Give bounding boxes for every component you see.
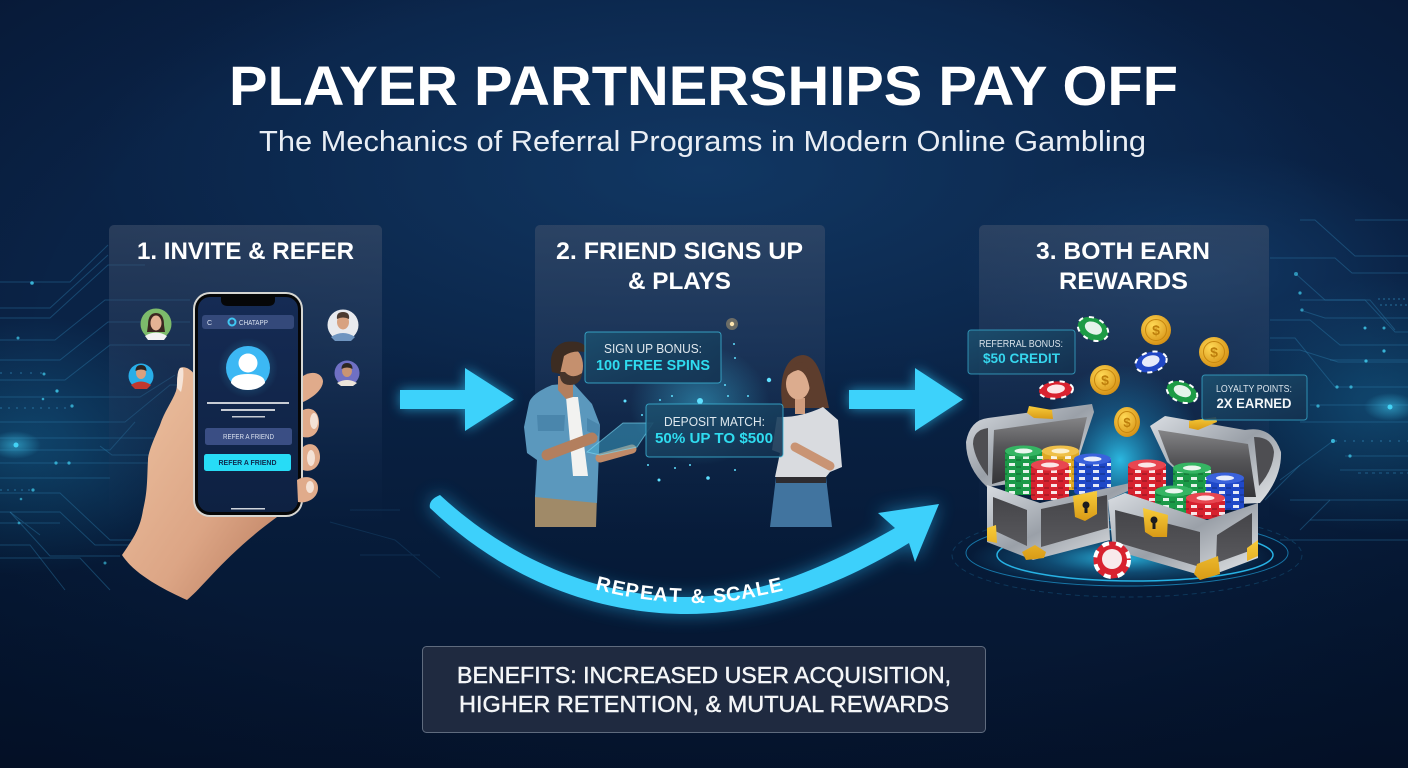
gold coin: [1114, 407, 1140, 437]
avatar: man on purple: [334, 360, 360, 386]
left chest: [966, 404, 1130, 560]
gold coin: [1199, 337, 1229, 367]
gold coin: $: [1152, 322, 1160, 338]
phone header bar: C: [207, 320, 212, 327]
illustration: friend avatars: [128, 308, 360, 389]
man in denim shirt: [524, 342, 632, 527]
keyhole plate: [1073, 491, 1097, 521]
gold coin: [1141, 315, 1171, 345]
woman with long hair: [770, 355, 842, 527]
circuit nodes: right: [1294, 272, 1408, 458]
gold corners: [1194, 540, 1258, 580]
arrow: repeat and scale loop: [430, 495, 939, 614]
gold latch: [1027, 406, 1053, 419]
phone header bar: [202, 315, 294, 329]
avatar: woman on green: [140, 308, 172, 340]
arrow label: [594, 573, 785, 608]
arrow: step 2 to step 3: [849, 368, 963, 431]
keyhole plate: [1143, 508, 1168, 537]
gold coin: $: [1210, 344, 1218, 360]
body: [987, 483, 1130, 560]
red chip: [1038, 380, 1074, 400]
callout: referral bonus: $50 CREDIT: [983, 350, 1060, 366]
circuit pattern: right: [1265, 220, 1408, 540]
floating coins and chips: [1038, 312, 1229, 437]
centre sparkle field: [624, 318, 771, 482]
arrow label: S: [712, 585, 727, 607]
arrow label: &: [690, 586, 705, 608]
arrow: step 1 to step 2: [400, 368, 514, 431]
circuit pattern: left: [0, 245, 440, 590]
callout: sign up bonus: SIGN UP BONUS:: [604, 342, 702, 356]
callout: loyalty points: 2X EARNED: [1216, 395, 1292, 411]
arrow label: P: [624, 579, 640, 603]
heading: step 3: [1036, 238, 1210, 295]
arrow label: A: [739, 580, 757, 604]
panel: benefits: [422, 646, 986, 732]
gold coin: [1090, 365, 1120, 395]
callout: referral bonus: REFERRAL BONUS:: [979, 339, 1063, 350]
phone: [193, 292, 303, 517]
gold coin: $: [1123, 415, 1131, 430]
callout: loyalty points: LOYALTY POINTS:: [1216, 384, 1292, 395]
gold latch: [1189, 417, 1217, 430]
holographic tablet: [587, 423, 653, 455]
avatar: man on light: [328, 310, 358, 341]
arrow label: R: [594, 573, 613, 598]
title: PLAYER PARTNERSHIPS PAY OFF: [229, 54, 1178, 117]
benefits text: HIGHER RETENTION, & MUTUAL REWARDS: [459, 691, 949, 717]
green chip: [1163, 377, 1201, 407]
circuit nodes: left: [0, 281, 106, 564]
benefits text: BENEFITS: INCREASED USER ACQUISITION,: [457, 662, 951, 688]
gold coin: $: [1101, 372, 1109, 388]
subtitle: The Mechanics of Referral Programs in Modern Online Gambling: [259, 126, 1146, 158]
phone header bar: CHATAPP: [239, 320, 268, 327]
arrow label: A: [652, 583, 669, 607]
arrow label: E: [639, 582, 655, 605]
callout: deposit match: 50% UP TO $500: [655, 430, 773, 447]
hand palm: [122, 367, 277, 600]
gold corners: [987, 525, 1046, 560]
panel: step 2 background: [535, 225, 825, 535]
callout: deposit match: DEPOSIT MATCH:: [664, 415, 765, 429]
profile avatar: [218, 338, 278, 398]
heading: step 1: 1. INVITE & REFER: [137, 238, 354, 265]
heading: step 2: & PLAYS: [628, 268, 731, 295]
heading: step 2: [556, 238, 803, 295]
arrow label: C: [725, 583, 742, 606]
button: refer a friend, muted: [205, 428, 292, 445]
fingers: [297, 373, 323, 502]
button: refer a friend, highlighted: [204, 454, 291, 471]
arrow label: E: [609, 576, 627, 601]
callout: sign up bonus: 100 FREE SPINS: [596, 357, 710, 374]
blue chip: [1133, 348, 1169, 376]
arrow label: E: [767, 574, 785, 598]
heading: step 3: REWARDS: [1059, 268, 1188, 295]
lid: [966, 404, 1094, 487]
avatar: boy on blue: [128, 364, 154, 389]
illustration: friends signing up: [524, 318, 842, 527]
button: refer a friend, highlighted: REFER A FRIEND: [218, 460, 276, 467]
thumbnail: [177, 368, 183, 392]
callout: deposit match: [646, 404, 783, 457]
callout: loyalty points: [1202, 375, 1307, 420]
body: [1108, 493, 1258, 577]
callout: sign up bonus: [585, 332, 721, 383]
fingernails: [306, 413, 318, 493]
illustration: treasure chests and rewards: [952, 312, 1307, 597]
heading: step 3: 3. BOTH EARN: [1036, 238, 1210, 265]
placeholder lines: [207, 402, 289, 418]
panel: step 3 background: [979, 225, 1269, 525]
green chip: [1074, 312, 1112, 346]
button: refer a friend, muted: REFER A FRIEND: [223, 434, 274, 441]
illustration: hand holding phone: [122, 292, 323, 600]
glowing platform: [952, 365, 1302, 597]
chips in chest: [1005, 446, 1111, 500]
callout: referral bonus: [968, 330, 1075, 374]
panel: step 1 background: [109, 225, 382, 525]
chips in chest: [1128, 460, 1244, 519]
lid: [1150, 416, 1281, 505]
arrow label: L: [754, 577, 770, 601]
arrow label: T: [669, 585, 682, 607]
red chip in front: [1094, 542, 1130, 578]
heading: step 2: 2. FRIEND SIGNS UP: [556, 238, 803, 265]
right chest: [1108, 416, 1281, 580]
benefits text: [457, 662, 951, 717]
